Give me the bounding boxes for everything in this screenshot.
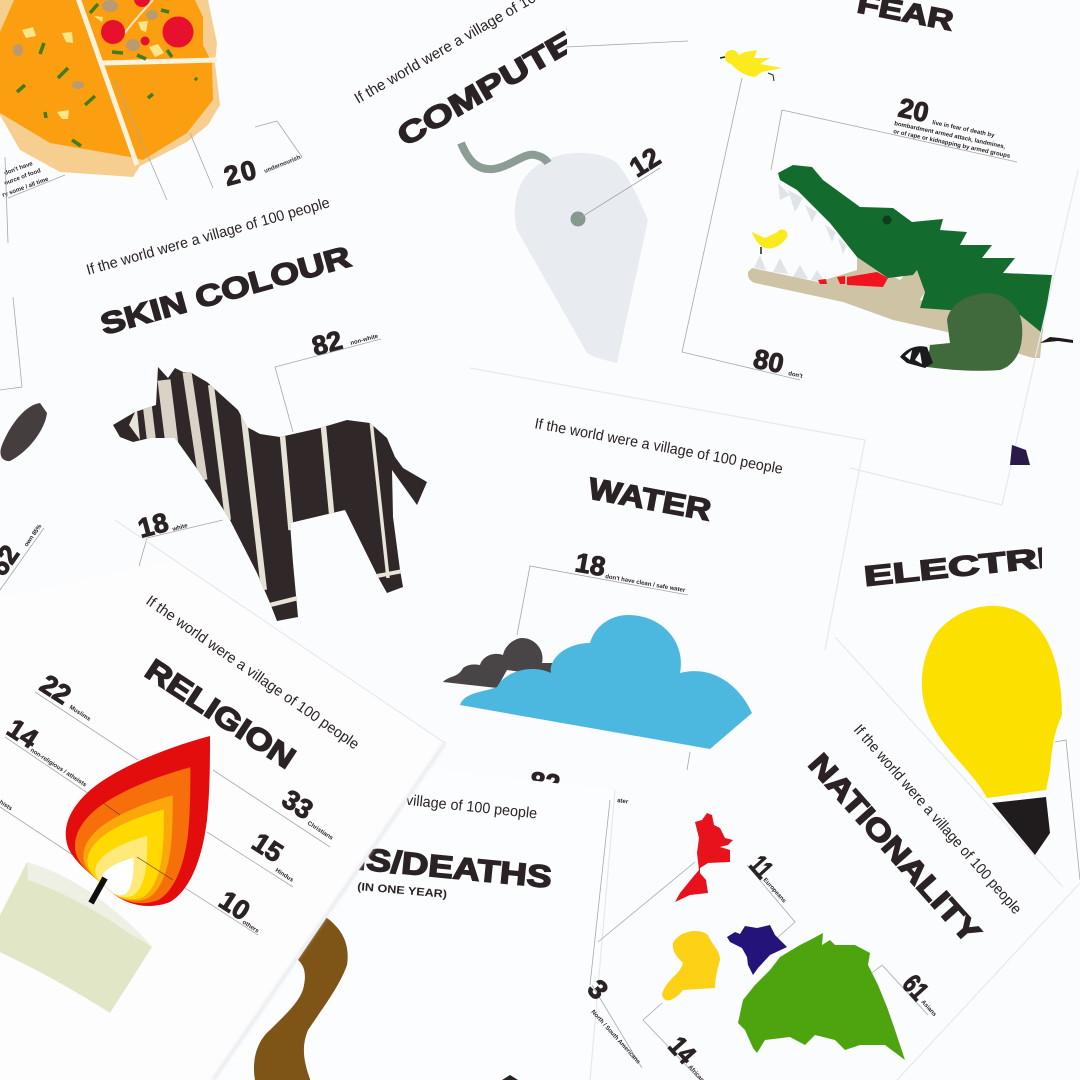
10 others: 10 <box>214 885 255 926</box>
14 non-religious: 14 <box>2 713 43 754</box>
14 Africans: 14 <box>663 1031 702 1070</box>
61 Asians: 61 <box>897 969 934 1006</box>
title: RELIGION <box>139 653 301 776</box>
blue cloud <box>460 615 752 749</box>
22 Muslims: 22 <box>35 669 76 710</box>
20 fear: bombardment armed attack, landmines, <box>894 121 1006 151</box>
13 Americas fragment: 3 <box>582 974 614 1005</box>
card: food (pizza) <box>0 0 302 243</box>
fragment: 37 number and stripe <box>1010 337 1073 465</box>
card: nationality <box>582 637 1080 1080</box>
33 Christians <box>277 784 334 842</box>
20 fear: live in fear of death by <box>932 120 995 139</box>
candle <box>0 862 152 1013</box>
80 don't: 80 <box>751 344 786 379</box>
18 don't have water: don't have clean / safe water <box>605 574 686 594</box>
80 don't <box>751 344 803 380</box>
10 others: others <box>241 920 260 935</box>
map: red <box>675 813 733 902</box>
pizza illustration <box>0 0 220 177</box>
18 don't have water <box>573 547 686 594</box>
33 Christians: 33 <box>277 784 318 825</box>
title: BIRTHS/DEATHS <box>251 831 553 895</box>
food caption: don't have <box>4 161 34 177</box>
subtitle: If the world were a village of 100 people <box>850 721 1025 918</box>
15 Hindus: Hindus <box>274 868 295 884</box>
card: births and deaths <box>210 760 615 1080</box>
leader lines <box>590 800 928 1078</box>
subtitle: If the world were a village of 100 people <box>143 592 362 753</box>
food caption: ource of food <box>4 168 42 187</box>
leader lines <box>0 692 330 935</box>
subtitle: If the world were a village of 100 people <box>285 779 538 822</box>
61 Asians: Asians <box>920 999 938 1018</box>
crocodile <box>748 165 1052 371</box>
wick <box>91 878 105 903</box>
flame <box>66 736 210 906</box>
22 Muslims: Muslims <box>68 705 92 723</box>
11 Europeans: Europeans <box>762 877 787 905</box>
brown river shape <box>254 900 348 1080</box>
zebra <box>113 367 427 621</box>
18 white: white <box>171 523 189 533</box>
18 white <box>135 507 189 544</box>
80 don't: don't <box>788 371 803 380</box>
map: blue <box>727 925 787 975</box>
food caption: ry some / all time <box>2 176 50 199</box>
12: 12 <box>624 142 666 183</box>
82 non-white: non-white <box>350 334 380 347</box>
map: green <box>738 933 905 1060</box>
card: electricity <box>862 531 1080 880</box>
20 fear <box>893 93 1011 160</box>
14 non-religious <box>2 713 88 789</box>
subtitle: If the world were a village of 100 people <box>84 194 332 279</box>
20 fear: 20 <box>896 93 931 128</box>
fragment: 62 own <box>0 523 44 590</box>
title: ELECTRICITY <box>862 531 1080 592</box>
title: SKIN COLOUR <box>97 240 355 342</box>
card: fear <box>682 0 1078 505</box>
18 don't have water: 18 <box>573 547 608 582</box>
card: water <box>443 368 865 800</box>
title: WATER <box>586 472 714 528</box>
22 Muslims <box>35 669 92 723</box>
13 Americas fragment <box>582 974 641 1066</box>
20 undernourished <box>221 155 302 192</box>
20 undernourished: undernourish <box>264 155 302 175</box>
fragment: 62 own: own 85% <box>24 523 44 548</box>
20 undernourished: 20 <box>221 155 259 192</box>
15 Hindus <box>247 827 295 884</box>
card: religion <box>0 520 445 1080</box>
subtitle year: (IN ONE YEAR) <box>357 881 448 901</box>
11 Europeans: 11 <box>744 850 779 884</box>
33 Christians: Christians <box>306 821 334 842</box>
18 white: 18 <box>135 507 172 544</box>
subtitle: If the world were a village of 100 people <box>533 415 784 478</box>
mouse icon <box>461 41 688 363</box>
82 non-white: 82 <box>309 325 346 362</box>
bird lower <box>752 230 788 254</box>
13 Americas fragment: North / South Americans <box>590 1009 641 1066</box>
15 Hindus: 15 <box>247 827 288 868</box>
card: computer <box>352 0 688 363</box>
light bulb <box>922 606 1062 855</box>
20 fear: or of rape or kidnapping by armed groups <box>893 129 1011 160</box>
card: skin colour <box>0 194 427 621</box>
82 non-white <box>309 325 380 362</box>
map: yellow <box>662 931 720 1000</box>
fragment: water caption: ater <box>617 798 629 806</box>
title: NATIONALITY <box>802 748 986 950</box>
food caption <box>2 161 50 199</box>
title: COMPUTERS <box>392 0 627 153</box>
fragment: dark seed shape <box>0 403 47 461</box>
dark cloud <box>443 638 556 688</box>
fragment: 82 behind card: 82 <box>528 766 562 800</box>
14 non-religious: non-religious / atheists <box>29 748 88 789</box>
bird top <box>720 50 782 81</box>
